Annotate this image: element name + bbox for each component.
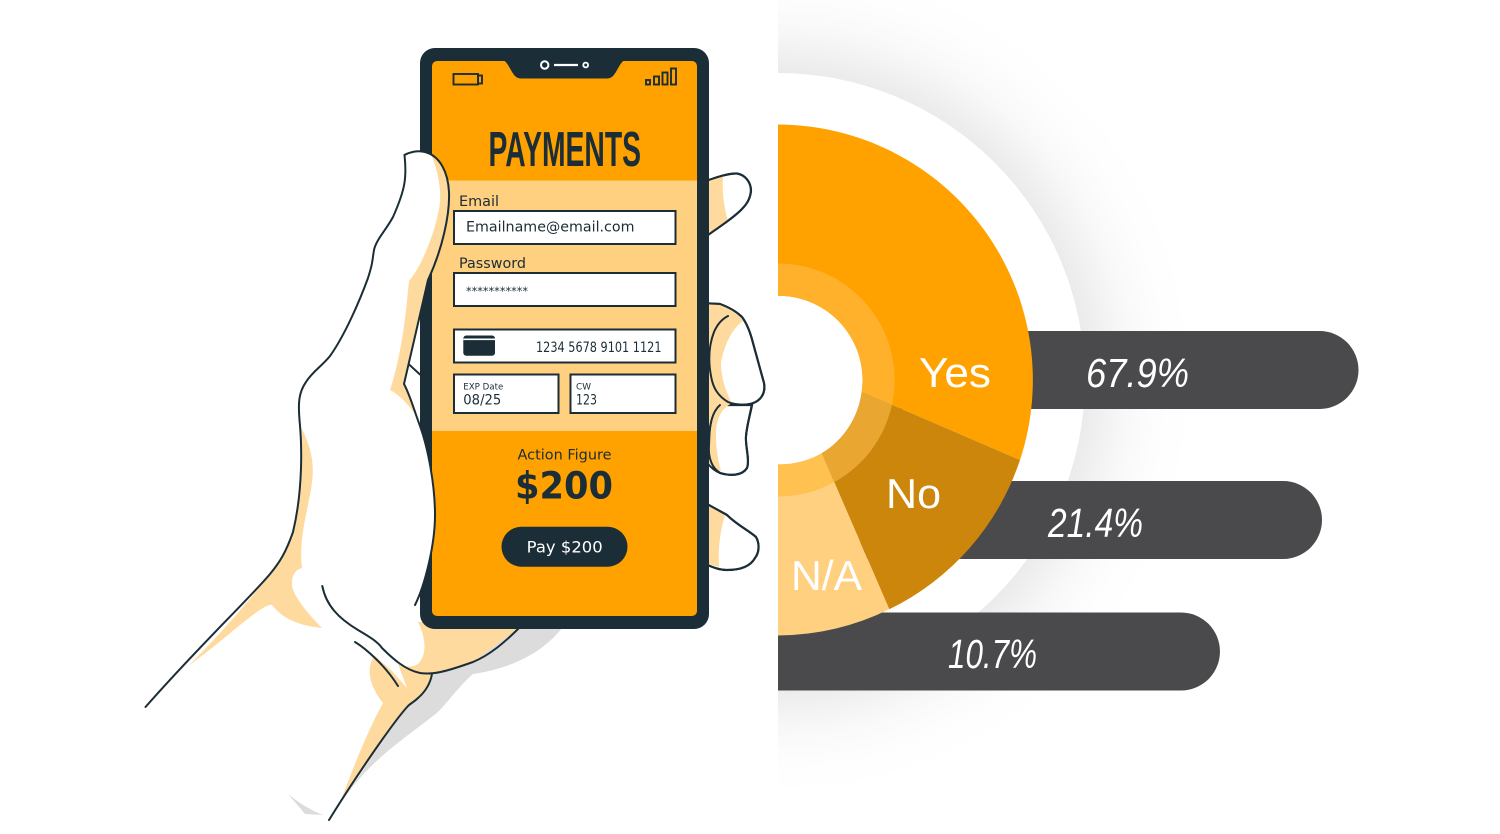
finger 3 — [700, 395, 752, 475]
heading: PAYMENTS — [488, 122, 641, 177]
value: 10.7%: 10.7% — [948, 631, 1037, 677]
amount: $200 — [515, 464, 613, 508]
lower wrist contour — [329, 674, 432, 820]
inner ring: yes — [778, 263, 895, 405]
label: no: No — [886, 470, 941, 517]
slice: no — [822, 392, 1020, 609]
thumb contour — [404, 151, 449, 605]
right fingers — [700, 173, 764, 570]
value: 21.4%: 21.4% — [1047, 500, 1143, 546]
white ring behind pie — [778, 73, 1085, 687]
pie chart — [778, 124, 1033, 636]
phone — [420, 48, 709, 629]
shadow at hand base — [288, 794, 323, 815]
icon: signal bars — [646, 68, 676, 84]
pay button — [502, 527, 628, 567]
expiry field: EXP Date — [463, 382, 504, 392]
palm fold line — [355, 642, 398, 686]
cvv field: CW — [576, 382, 591, 392]
bar: yes — [900, 331, 1358, 409]
label: yes: Yes — [919, 349, 991, 396]
thumb shading — [390, 156, 449, 426]
chart background halo — [778, 0, 1208, 834]
password field — [454, 273, 676, 306]
card number field — [454, 330, 676, 362]
email field: Emailname@email.com — [466, 220, 634, 236]
label: n/a: N/A — [791, 552, 862, 599]
notch — [500, 55, 630, 78]
finger 4 — [700, 500, 759, 570]
cvv field — [570, 374, 676, 413]
action figure label: Action Figure — [518, 448, 612, 464]
hand shadow — [288, 626, 562, 815]
palm shading under phone — [340, 620, 519, 803]
bar: n/a — [778, 612, 1220, 690]
email field — [454, 211, 676, 244]
expiry field — [454, 374, 558, 413]
card number field: 1234 5678 9101 1121 — [536, 340, 662, 356]
bar: no — [860, 481, 1322, 559]
inner ring: no — [822, 392, 892, 482]
shadow under wrist — [345, 626, 562, 797]
icon: battery — [454, 74, 482, 84]
palm crease and wrist — [322, 586, 519, 674]
password label: Password — [459, 256, 526, 272]
form panel — [432, 180, 697, 431]
cvv field: 123 — [576, 392, 597, 408]
phone body — [420, 48, 709, 629]
inner ring: n/a — [778, 453, 834, 497]
email label: Email — [459, 194, 499, 210]
value bars — [778, 331, 1358, 690]
pay button: Pay $200 — [527, 538, 603, 556]
slice: yes — [778, 124, 1033, 460]
thumb web line — [409, 365, 420, 374]
finger 1 — [700, 173, 751, 241]
hand outer contour — [146, 155, 405, 707]
camera and speaker — [541, 61, 588, 69]
hand — [146, 151, 519, 820]
slice: n/a — [778, 453, 889, 636]
icon: credit card — [463, 336, 495, 356]
screen — [432, 61, 697, 616]
expiry field: 08/25 — [463, 392, 501, 408]
finger 2 — [700, 303, 764, 445]
thumb and palm white mask — [380, 151, 449, 605]
password field: *********** — [466, 284, 528, 298]
value: 67.9%: 67.9% — [1086, 350, 1189, 396]
palm edge shading — [188, 428, 322, 666]
